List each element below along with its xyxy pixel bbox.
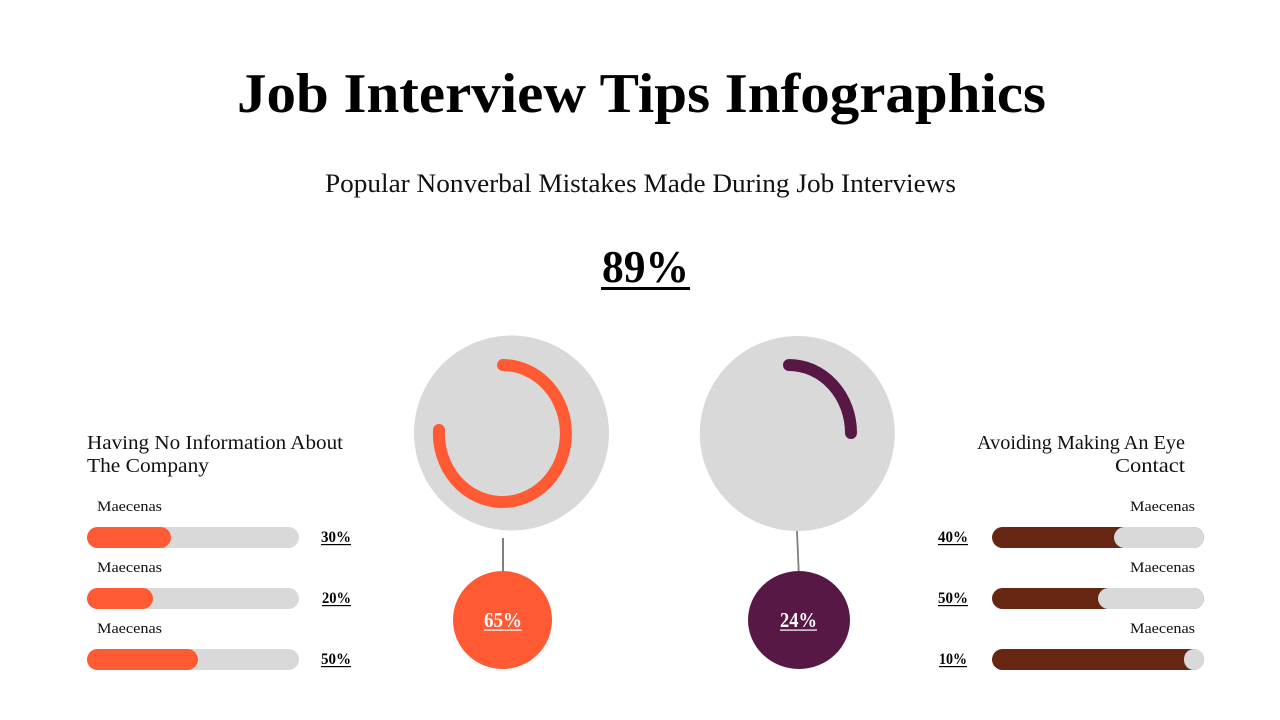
right bar row 3: 10%: Maecenas: [1130, 621, 1195, 637]
left bar row 1: 30%: [87, 499, 351, 548]
chart: 65% radial gauge: 65%: [484, 608, 522, 632]
chart: 24% radial gauge: 24%: [780, 608, 817, 632]
left bar row 1: 30%: Maecenas: [97, 499, 162, 515]
right panel heading: [977, 432, 1185, 477]
right panel heading: Avoiding Making An Eye: [977, 432, 1185, 454]
headline statistic: 89%: 89%: [602, 242, 689, 292]
left bar row 1: 30%: 30%: [321, 529, 351, 546]
left panel heading: The Company: [87, 455, 209, 477]
right bar row 1: 40%: [938, 499, 1204, 548]
left panel heading: [87, 432, 343, 477]
left bar row 3: 50%: [87, 621, 351, 670]
left bar row 2: 20%: 20%: [322, 590, 351, 607]
right bar row 2: 50%: 50%: [938, 590, 968, 607]
panel: avoiding eye contact: [938, 432, 1204, 670]
left panel heading: Having No Information About: [87, 432, 343, 454]
right bar row 1: 40%: Maecenas: [1130, 499, 1195, 515]
subtitle: Popular Nonverbal Mistakes Made During Job Interviews: [325, 169, 956, 198]
right bar row 2: 50%: Maecenas: [1130, 560, 1195, 576]
title: Job Interview Tips Infographics: [237, 63, 1046, 125]
left bar row 3: 50%: Maecenas: [97, 621, 162, 637]
chart: 65% radial gauge: [414, 336, 609, 669]
chart: 24% radial gauge: [700, 336, 895, 669]
right bar row 3: 10%: [939, 621, 1204, 670]
right bar row 1: 40%: 40%: [938, 529, 968, 546]
left bar row 3: 50%: 50%: [321, 651, 351, 668]
right bar row 3: 10%: 10%: [939, 651, 967, 668]
right bar row 2: 50%: [938, 560, 1204, 609]
left bar row 2: 20%: [87, 560, 351, 609]
left bar row 2: 20%: Maecenas: [97, 560, 162, 576]
right panel heading: Contact: [1115, 455, 1185, 477]
panel: having no information: [87, 432, 351, 670]
